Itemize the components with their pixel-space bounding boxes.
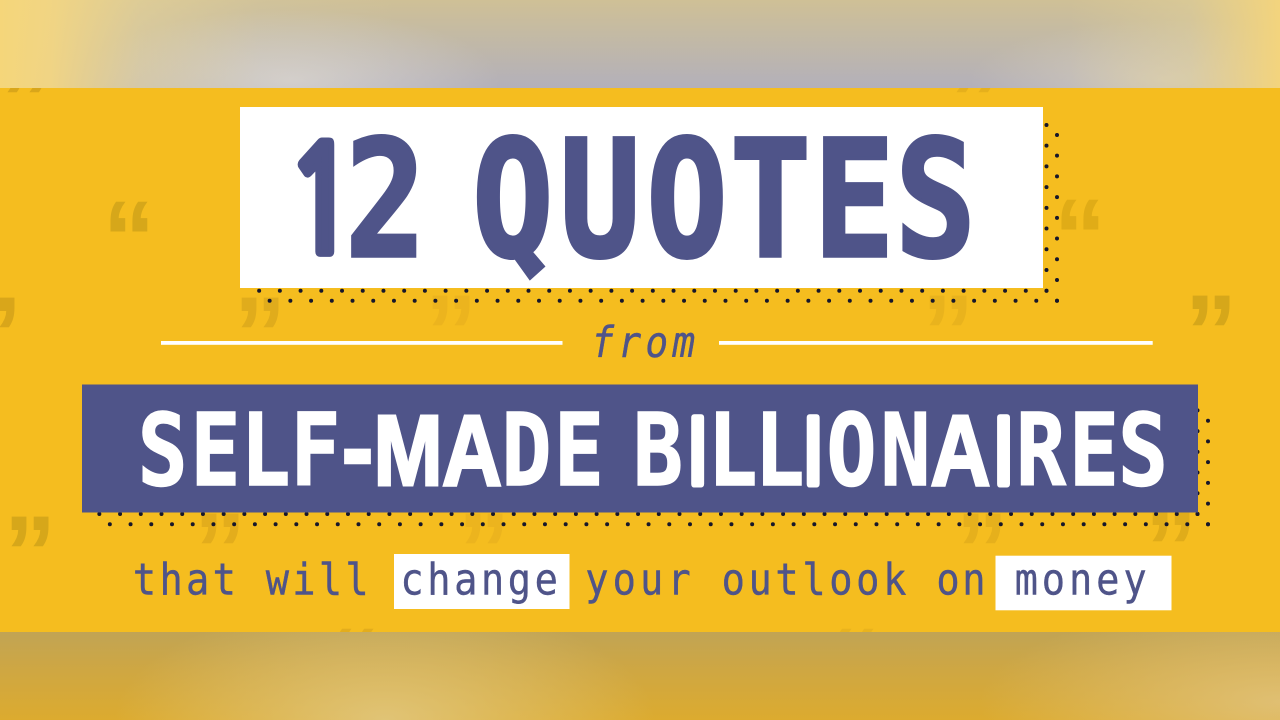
subtitle highlight: money — [996, 556, 1172, 610]
subtitle: on — [936, 554, 986, 605]
subtitle — [133, 554, 1147, 605]
background quote marks: ” — [1145, 490, 1197, 607]
subtitle: your — [585, 554, 691, 605]
subtitle: money — [1015, 554, 1147, 605]
subtitle highlight: change — [394, 554, 570, 609]
dotted shadow: billionaires box — [98, 409, 1208, 524]
background quote marks: ” — [0, 41, 52, 158]
subtitle: change — [400, 554, 558, 605]
title: 12 QUOTES: 1 — [285, 130, 359, 276]
heading: SELF-MADE BILLIONAIRES: SELF-MADE BILLIONAIRES — [138, 393, 1168, 509]
background quote marks: “ — [1054, 178, 1106, 295]
background quote marks: ” — [1185, 274, 1237, 391]
background quote marks: ” — [194, 492, 246, 609]
blurred top band — [0, 0, 1280, 88]
background quote marks: ” — [458, 492, 510, 609]
background quote marks: ” — [4, 495, 56, 612]
divider left — [161, 341, 562, 345]
background quote marks: ” — [922, 274, 974, 391]
heading box — [82, 384, 1198, 512]
background quote marks: ” — [949, 41, 1001, 158]
blurred bottom band — [0, 632, 1280, 720]
dotted shadow: title box — [259, 124, 1057, 301]
background quote marks: ” — [425, 274, 477, 391]
subtitle: that will — [133, 554, 369, 605]
title box — [240, 107, 1043, 288]
background quote marks: ” — [234, 276, 286, 393]
background quote marks: ” — [956, 492, 1008, 609]
background quote marks: “ — [103, 180, 155, 297]
title: 12 QUOTES: 2 QUOTES — [345, 107, 976, 295]
word: from: from — [591, 317, 695, 368]
subtitle: outlook — [722, 554, 906, 605]
divider right — [719, 341, 1153, 345]
